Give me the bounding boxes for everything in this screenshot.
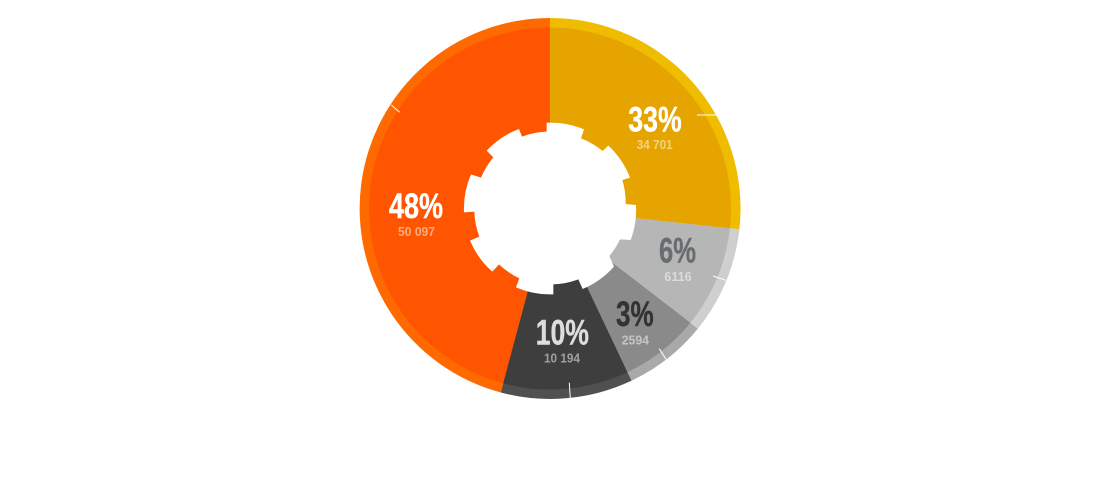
label: 48%: 50 097 [398, 225, 435, 239]
label: 33%: 33% [628, 101, 682, 140]
tick: 3% [659, 349, 666, 359]
tick: 33% [697, 114, 717, 116]
label: 6% [659, 231, 696, 284]
tick: 48% [391, 105, 400, 112]
segment: 3% mid grey [550, 208, 698, 381]
segment: 6% light grey [550, 208, 739, 329]
label: 10%: 10% [536, 313, 589, 352]
label: 3%: 2594 [622, 334, 649, 348]
label: 33%: 34 701 [637, 138, 673, 152]
label: 10% [536, 313, 589, 366]
segment: 48% orange [360, 18, 550, 392]
label: 3%: 3% [616, 295, 654, 334]
segment: 10% dark grey [501, 208, 632, 399]
label: 33% [628, 101, 682, 152]
centre gear-shaped hole [464, 123, 636, 294]
label: 10%: 10 194 [544, 352, 580, 366]
label: 6%: 6116 [664, 270, 692, 284]
label: 48% [389, 187, 443, 239]
label: 3% [616, 295, 654, 348]
tick: 10% [569, 383, 570, 398]
label: 6%: 6% [659, 231, 696, 270]
tick: 6% [713, 276, 726, 280]
segment: 33% yellow [550, 18, 741, 229]
label: 48%: 48% [389, 187, 443, 226]
